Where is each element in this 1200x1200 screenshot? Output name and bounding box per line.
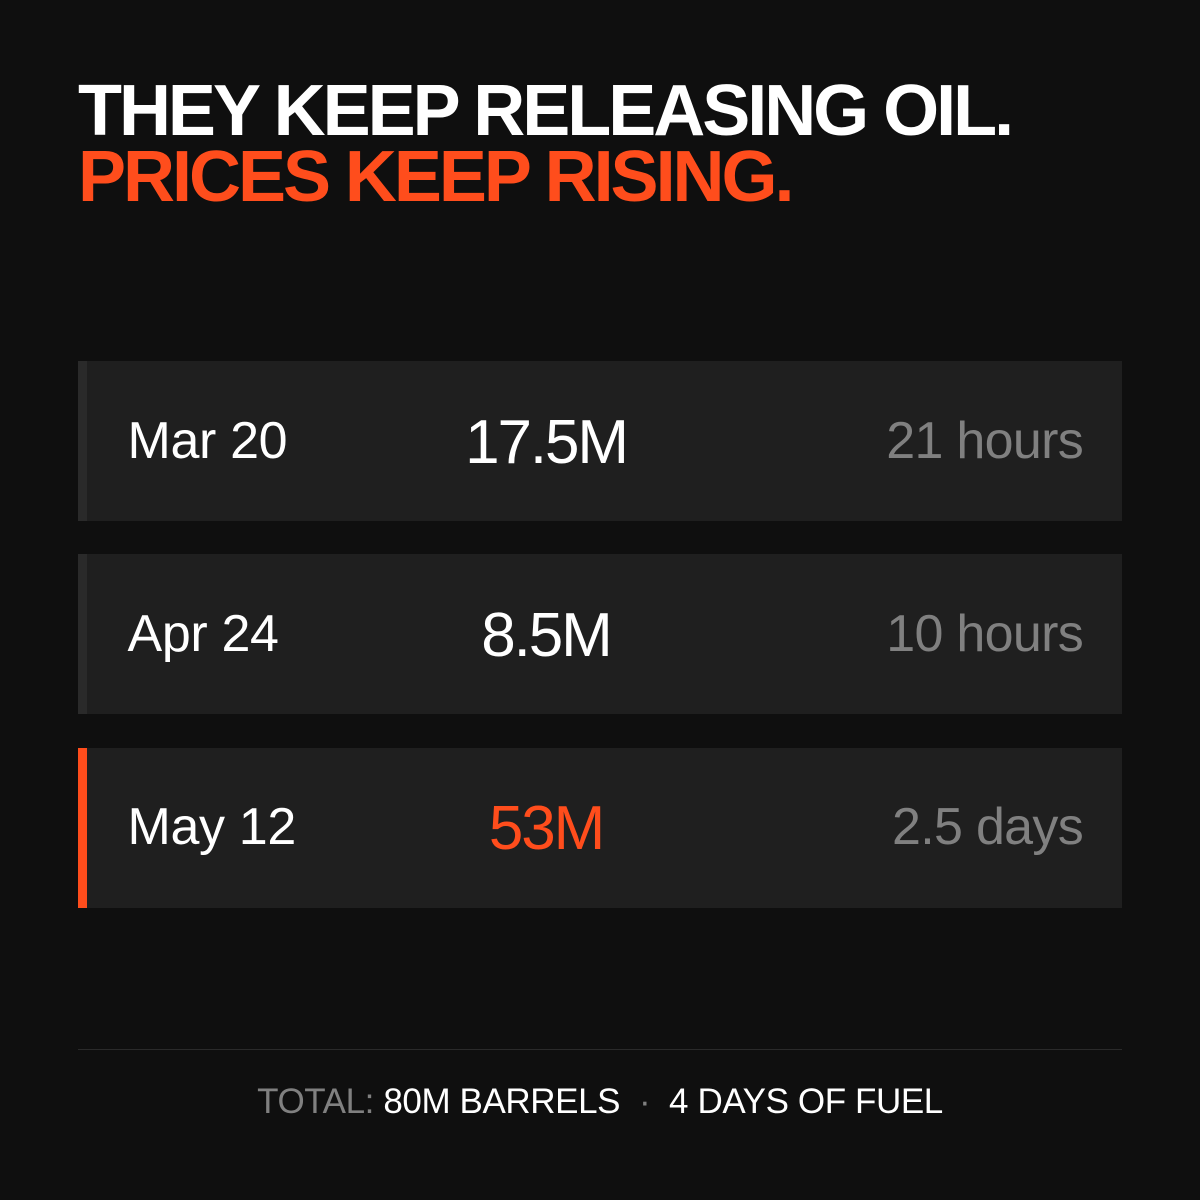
value: 8.5M: 8.5M [481, 601, 611, 670]
value: 17.5M: 17.5M [465, 408, 627, 477]
title line 1: THEY KEEP RELEASING OIL. [78, 71, 1011, 151]
duration: 2.5 days: 2.5 days [892, 798, 1083, 856]
date: Mar 20: Mar 20 [128, 412, 287, 470]
duration: 10 hours: 10 hours [886, 605, 1083, 663]
panel: May 12 release [78, 748, 1122, 908]
footer total: TOTAL: 80M BARRELS · 4 DAYS OF FUEL [257, 1082, 943, 1121]
panel: Apr 24 release [78, 554, 1122, 714]
duration: 21 hours: 21 hours [886, 412, 1083, 470]
date: May 12: May 12 [128, 798, 296, 856]
panel: Mar 20 release [78, 361, 1122, 521]
title line 2: PRICES KEEP RISING. [78, 137, 792, 217]
title [78, 71, 1011, 217]
date: Apr 24: Apr 24 [128, 605, 279, 663]
value: 53M: 53M [489, 794, 603, 863]
